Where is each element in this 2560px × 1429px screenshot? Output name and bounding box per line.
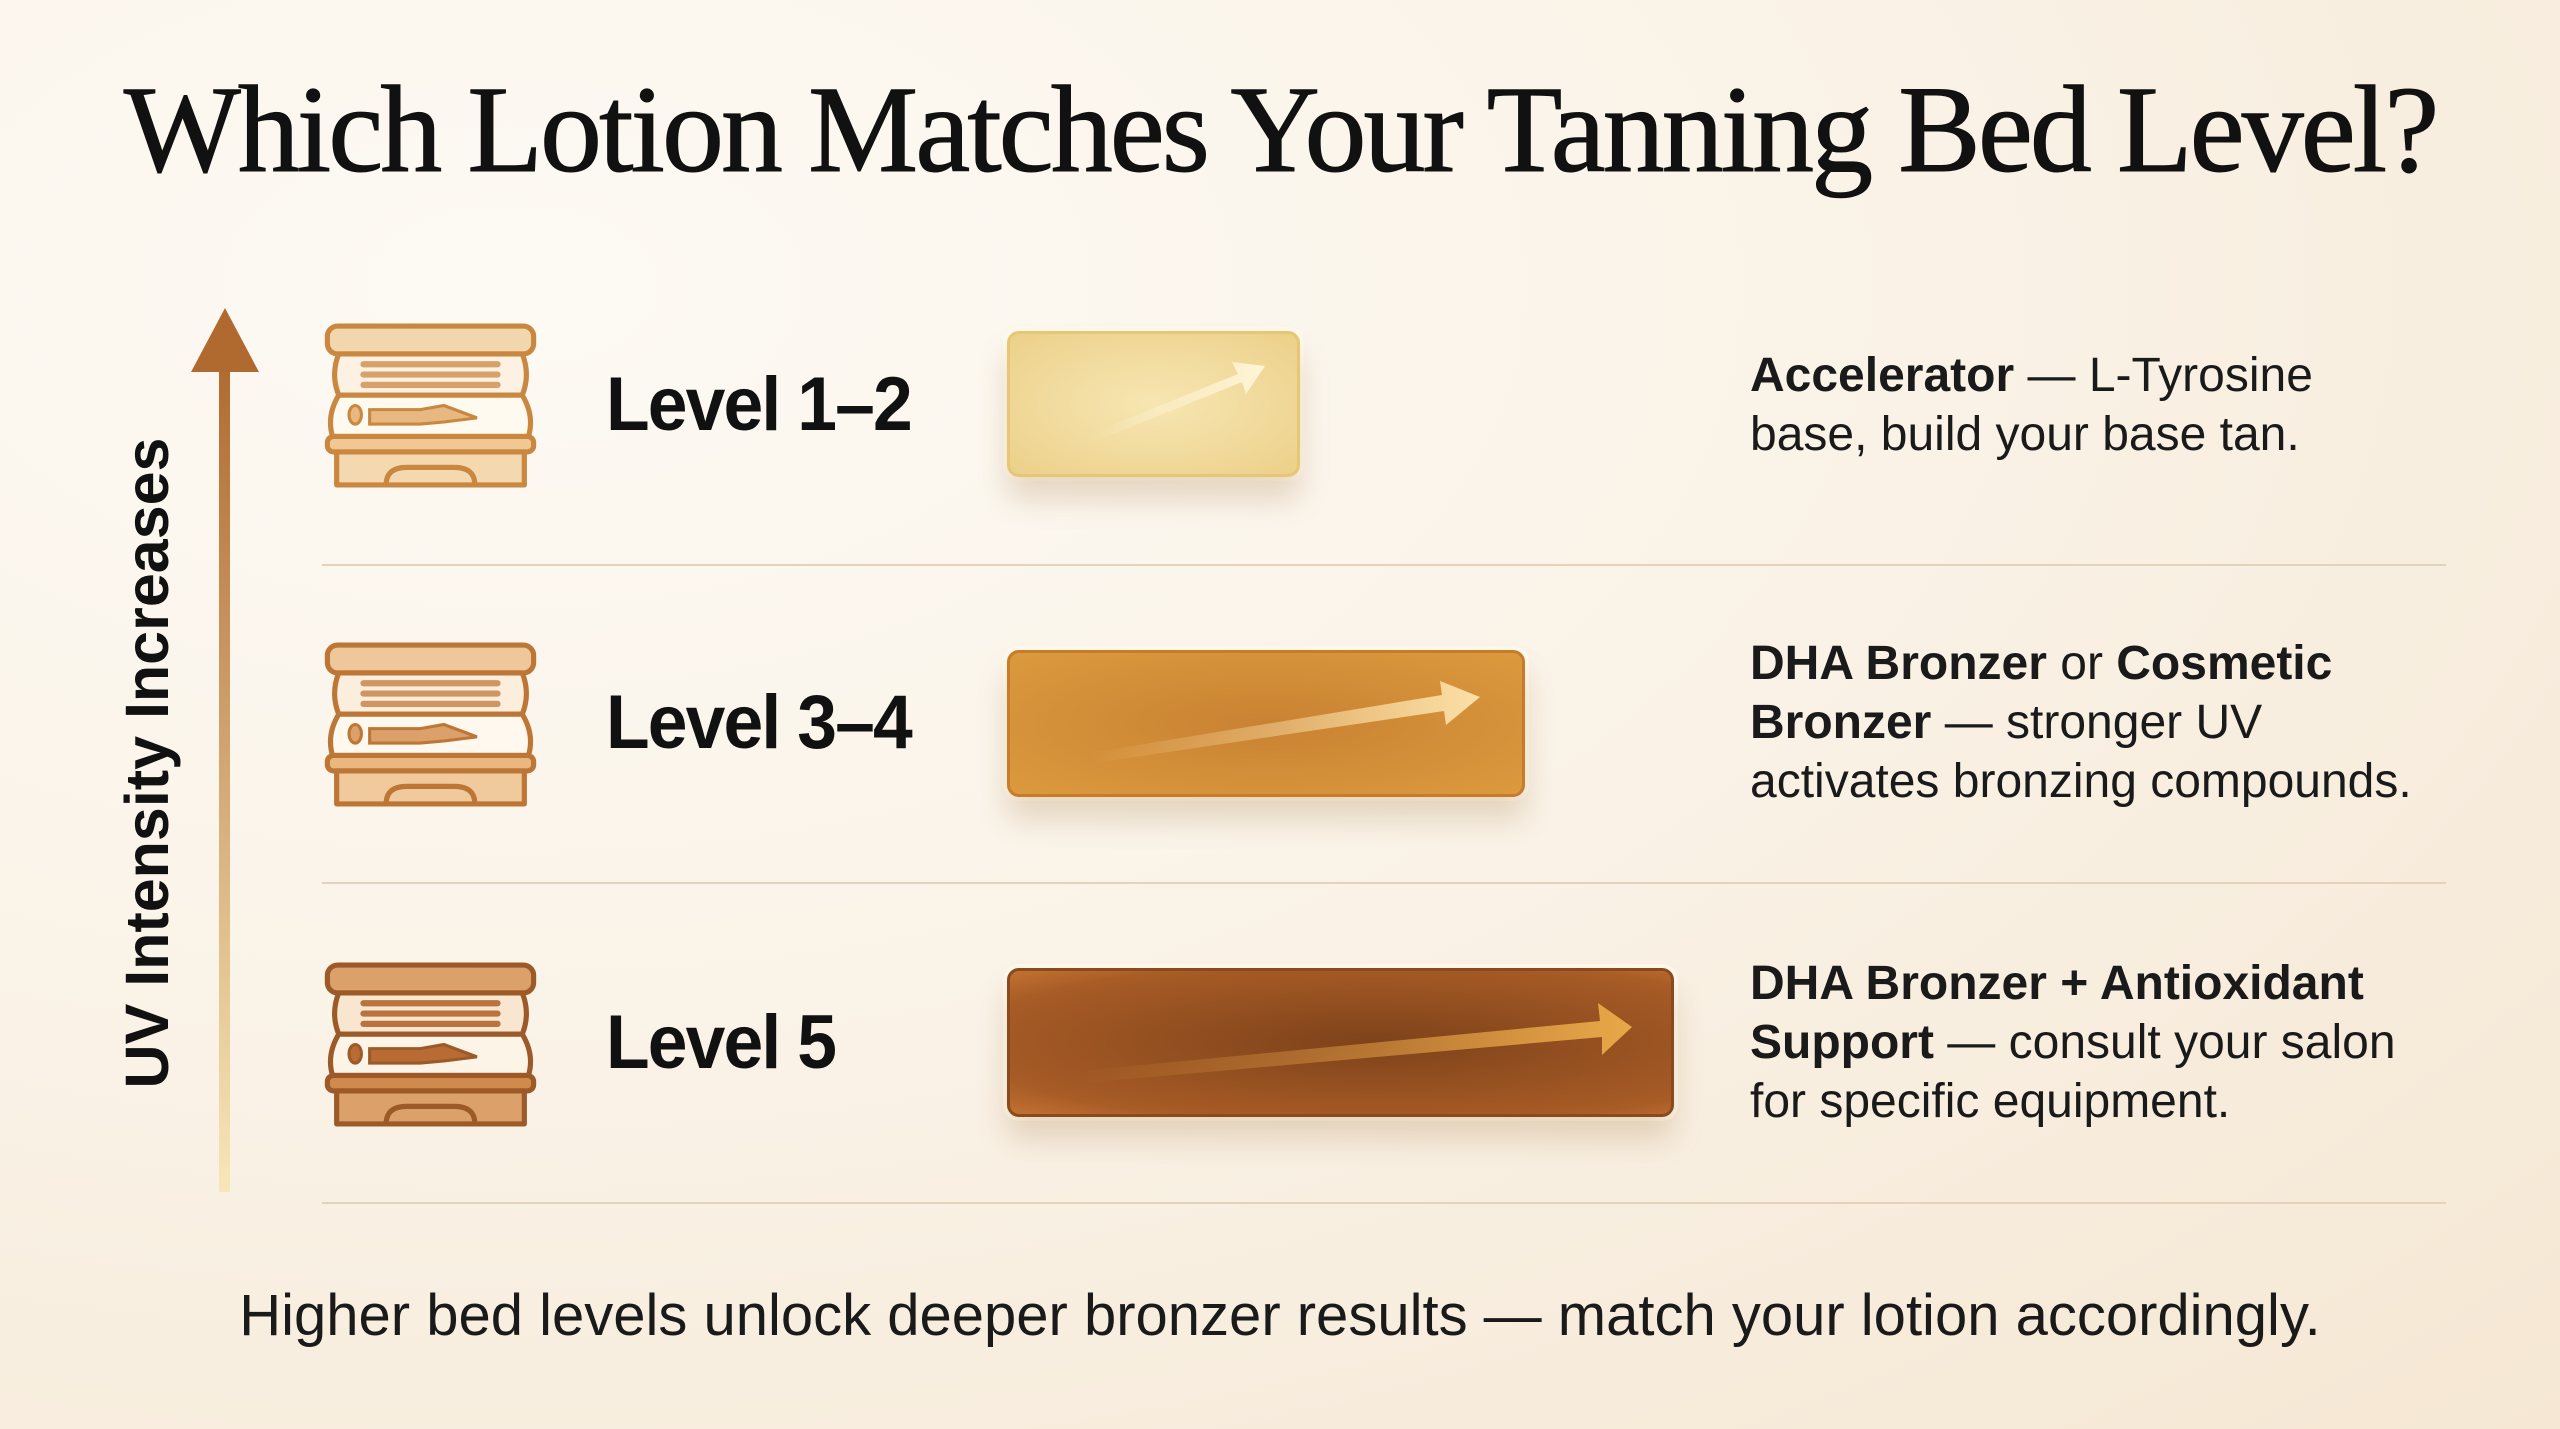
arrow — [1118, 362, 1265, 432]
arrow — [1120, 681, 1480, 758]
bar: level 5 — [1007, 968, 1674, 1117]
bar: level 1-2 — [1007, 331, 1300, 477]
axis label: UV Intensity Increases — [113, 438, 181, 1088]
arrow — [1138, 1003, 1632, 1078]
icon: tanning bed 3 — [324, 962, 536, 1126]
description: level 5: DHA Bronzer + Antioxidant — [1750, 957, 2364, 1010]
icon: tanning bed 1 — [324, 324, 536, 488]
description: level 3-4: DHA Bronzer or Cosmetic — [1750, 637, 2332, 690]
description: level 5: for specific equipment. — [1750, 1075, 2230, 1128]
bar: level 3-4 — [1007, 650, 1525, 797]
description: level 5 — [1750, 957, 2396, 1128]
icon: tanning bed 2 — [324, 642, 536, 806]
description: level 3-4: Bronzer — stronger UV — [1750, 696, 2262, 749]
description: level 3-4 — [1750, 637, 2412, 808]
description: level 1-2: Accelerator — L-Tyrosine — [1750, 349, 2313, 402]
description: level 1-2: base, build your base tan. — [1750, 408, 2300, 461]
description: level 5: Support — consult your salon — [1750, 1016, 2396, 1069]
label: level 5: Level 5 — [606, 1000, 835, 1085]
label: level 1-2: Level 1–2 — [606, 362, 911, 447]
title: Which Lotion Matches Your Tanning Bed Level? — [124, 61, 2436, 198]
description: level 3-4: activates bronzing compounds. — [1750, 755, 2412, 808]
description: level 1-2 — [1750, 349, 2313, 461]
arrow: UV intensity — [191, 308, 259, 1192]
footer note: Higher bed levels unlock deeper bronzer results — match your lotion accordingly. — [239, 1283, 2321, 1348]
label: level 3-4: Level 3–4 — [606, 680, 911, 765]
